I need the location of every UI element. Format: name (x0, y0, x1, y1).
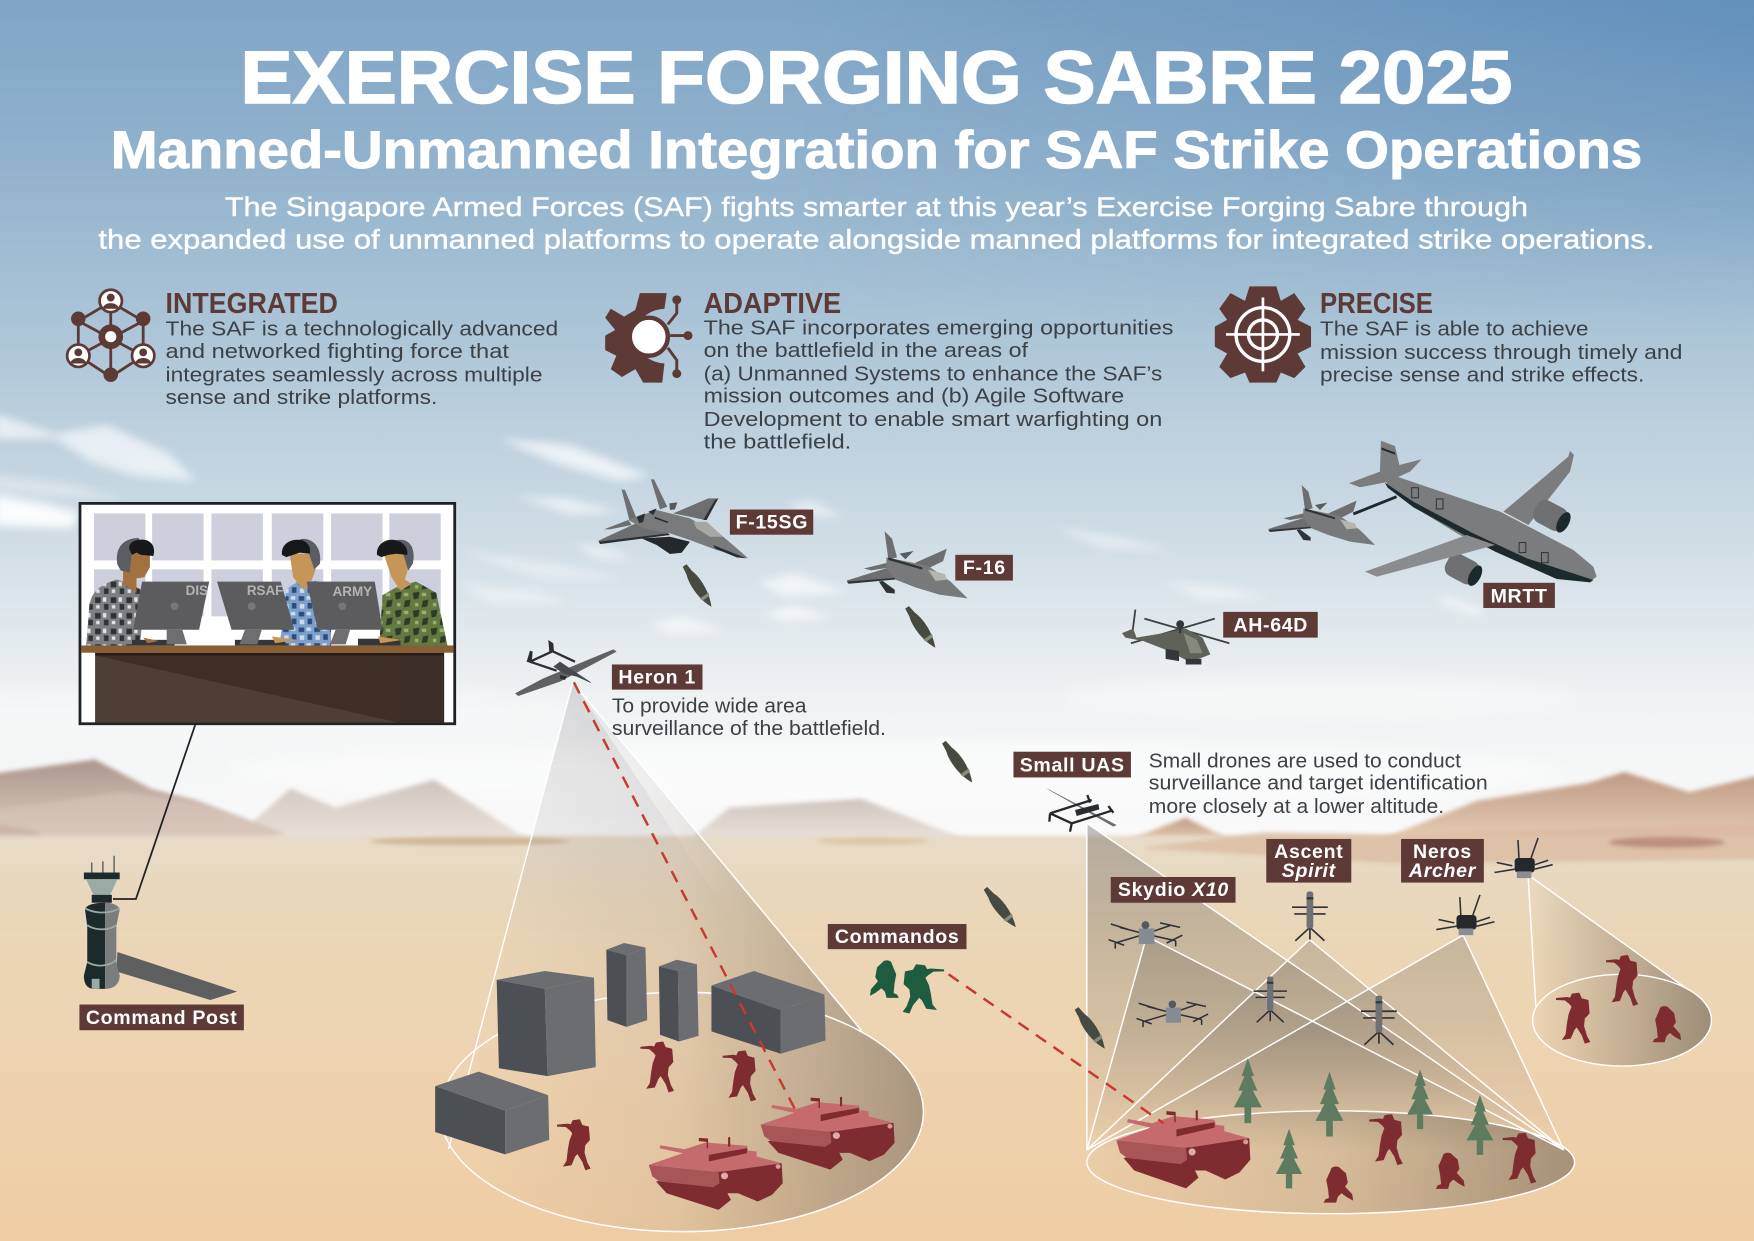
text: small UAS description: surveillance and target identification (1149, 772, 1488, 795)
label: Command Post: Command Post (86, 1007, 237, 1029)
keyboards and hands (132, 636, 403, 645)
desk (81, 645, 454, 723)
label: Neros Archer: Neros (1413, 841, 1472, 863)
label: Neros Archer: Archer (1408, 860, 1477, 882)
soldiers in forest (1324, 1114, 1536, 1203)
soldier: ARMY (377, 540, 447, 645)
monitor: ARMY: ARMY (333, 584, 372, 599)
block: adaptive: (a) Unmanned Systems to enhance the SAF’s (704, 362, 1162, 385)
building (606, 943, 647, 1027)
drone: Ascent Spirit lower (1254, 977, 1287, 1022)
block: integrated: integrates seamlessly across multiple (166, 363, 543, 386)
building (711, 971, 826, 1054)
block: adaptive: mission outcomes and (b) Agile Software (704, 385, 1124, 408)
label: Ascent Spirit (1266, 839, 1351, 883)
block: adaptive: The SAF incorporates emerging opportunities (704, 316, 1173, 339)
aircraft: MRTT (1349, 441, 1597, 589)
block: precise (1320, 288, 1682, 386)
trees (1234, 1058, 1493, 1188)
block: precise: precise sense and strike effects. (1320, 363, 1644, 386)
drone: small UAS fixed-wing (1046, 788, 1117, 832)
block: precise: The SAF is able to achieve (1320, 318, 1588, 341)
soldiers in urban area (557, 1041, 756, 1170)
drone: Neros Archer (1436, 895, 1494, 935)
building (435, 1072, 549, 1154)
aircraft: Heron 1 (515, 640, 617, 696)
block: integrated: INTEGRATED (166, 288, 338, 320)
icon: adaptive gear (605, 293, 692, 383)
laser line: commandos to tank (949, 974, 1163, 1123)
panel: Heron surveillance cone (440, 682, 923, 1232)
drone: Ascent Spirit right (1361, 996, 1397, 1045)
drone: Skydio X10 lower (1137, 1001, 1208, 1027)
block: precise: PRECISE (1320, 288, 1433, 320)
intro text: the expanded use of unmanned platforms to operate alongside manned platforms for integrated strike operations. (98, 224, 1654, 254)
panel: command centre inset (80, 503, 455, 724)
connector: inset to command post (113, 725, 195, 899)
block: integrated: and networked fighting force that (166, 340, 509, 363)
label: Heron 1: Heron 1 (618, 666, 696, 688)
commandos (870, 960, 944, 1014)
block: precise: mission success through timely and (1320, 341, 1682, 364)
label: Skydio X10: Skydio X10 (1118, 879, 1229, 901)
drone: Skydio X10 (1109, 921, 1182, 949)
text: Heron description (612, 695, 886, 740)
block: integrated: sense and strike platforms. (166, 386, 437, 409)
panel: small UAS cones and forest (1087, 823, 1575, 1214)
text: small UAS description: Small drones are used to conduct (1149, 749, 1461, 772)
soldier: DIS (86, 538, 154, 645)
text: small UAS description (1149, 749, 1488, 818)
block: adaptive: Development to enable smart warfighting on (704, 408, 1162, 431)
monitor: DIS (133, 582, 209, 644)
tank (649, 1137, 783, 1210)
monitor: RSAF (217, 582, 294, 644)
icon: integrated network (67, 290, 154, 382)
aircraft: F-15SG (598, 479, 748, 558)
soldiers at Neros target (1556, 955, 1681, 1044)
subtitle: Manned-Unmanned Integration for SAF Strike Operations (111, 121, 1642, 180)
block: adaptive: on the battlefield in the areas of (704, 339, 1028, 362)
tank (1116, 1110, 1250, 1188)
block: adaptive (704, 288, 1173, 454)
monitor: DIS: DIS (186, 583, 208, 598)
panel: Neros cone (1528, 875, 1711, 1066)
aircraft: AH-64D helicopter (1122, 610, 1229, 664)
laser line: Heron to tank (574, 682, 799, 1116)
intro text: The Singapore Armed Forces (SAF) fights smarter at this year’s Exercise Forging Sabre through (225, 192, 1528, 222)
block: integrated: The SAF is a technologically advanced (166, 318, 558, 341)
label: F-16: F-16 (963, 557, 1006, 579)
label: Small UAS: Small UAS (1020, 754, 1125, 776)
text: small UAS description: more closely at a lower altitude. (1149, 795, 1444, 818)
drone: Neros Archer upper (1494, 838, 1553, 878)
label: Neros Archer (1401, 839, 1484, 883)
label: F-15SG: F-15SG (736, 512, 808, 534)
label: AH-64D: AH-64D (1233, 614, 1308, 636)
label: MRTT: MRTT (1491, 585, 1548, 607)
icon: precise target gear (1215, 286, 1311, 383)
text: Heron description: surveillance of the battlefield. (612, 717, 886, 740)
building (659, 960, 699, 1041)
bombs (680, 562, 1109, 1052)
building (497, 971, 596, 1076)
aircraft: refuelling fighter (1268, 485, 1375, 545)
monitor: RSAF: RSAF (247, 583, 283, 598)
intro text (98, 192, 1654, 254)
aircraft: F-16 (847, 531, 968, 598)
block: adaptive: the battlefield. (704, 431, 851, 454)
label: AH-64D (1223, 612, 1318, 638)
tank (761, 1097, 895, 1170)
block: adaptive: ADAPTIVE (704, 288, 841, 320)
label: Ascent Spirit: Spirit (1282, 860, 1337, 882)
label: Ascent Spirit: Ascent (1274, 841, 1343, 863)
drone: Ascent Spirit (1292, 892, 1328, 941)
title: EXERCISE FORGING SABRE 2025 (241, 36, 1512, 119)
label: Commandos: Commandos (835, 926, 959, 948)
icon: command post tower (84, 856, 237, 1000)
label: F-16 (955, 555, 1013, 581)
monitor: ARMY (307, 582, 383, 644)
soldier: RSAF (280, 539, 331, 645)
text: Heron description: To provide wide area (612, 695, 807, 718)
label: MRTT (1483, 583, 1555, 608)
block: integrated (166, 288, 558, 409)
